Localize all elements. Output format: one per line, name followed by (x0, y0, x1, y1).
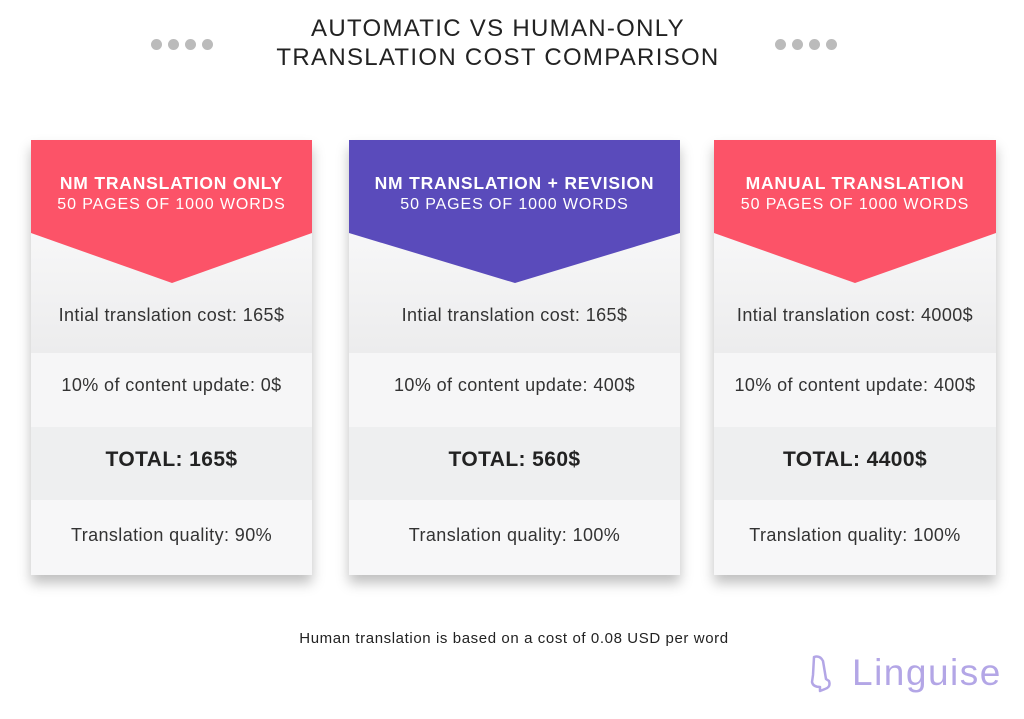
header (31, 140, 312, 283)
logo text: Linguise (852, 652, 1002, 693)
dots left (151, 39, 213, 50)
header: NM TRANSLATION ONLY (60, 173, 283, 193)
panel: manual translation: Intial translation cost: 4000$ (737, 305, 973, 325)
panel: manual translation: TOTAL: 4400$ (783, 448, 927, 471)
logo (810, 652, 1002, 693)
panel: NM translation only (31, 140, 312, 575)
panel: manual translation: Translation quality: 100% (749, 525, 961, 545)
header: 50 PAGES OF 1000 WORDS (400, 196, 629, 213)
panel: NM translation + revision: 10% of content update: 400$ (394, 375, 635, 395)
panel: NM translation only: 10% of content update: 0$ (61, 375, 282, 395)
panel: NM translation + revision: TOTAL: 560$ (448, 448, 580, 471)
title: AUTOMATIC VS HUMAN-ONLY (311, 15, 685, 42)
panel: manual translation (714, 140, 996, 575)
panel: NM translation only: Translation quality: 90% (71, 525, 272, 545)
icon: logo mark (810, 655, 831, 692)
panel: NM translation only: Intial translation cost: 165$ (59, 305, 284, 325)
header (349, 140, 680, 283)
panel: NM translation + revision: Translation quality: 100% (409, 525, 620, 545)
header: MANUAL TRANSLATION (746, 173, 964, 193)
panel: NM translation only: TOTAL: 165$ (106, 448, 238, 471)
panel: NM translation + revision (349, 140, 680, 575)
title: TRANSLATION COST COMPARISON (276, 44, 720, 71)
footnote: Human translation is based on a cost of 0.08 USD per word (299, 630, 729, 647)
dots right (775, 39, 837, 50)
header: NM TRANSLATION + REVISION (375, 173, 654, 193)
header: 50 PAGES OF 1000 WORDS (741, 196, 969, 213)
panel: NM translation + revision: Intial translation cost: 165$ (402, 305, 627, 325)
header (714, 140, 996, 283)
title (276, 15, 720, 71)
header: 50 PAGES OF 1000 WORDS (57, 196, 286, 213)
panel: manual translation: 10% of content update: 400$ (734, 375, 976, 395)
